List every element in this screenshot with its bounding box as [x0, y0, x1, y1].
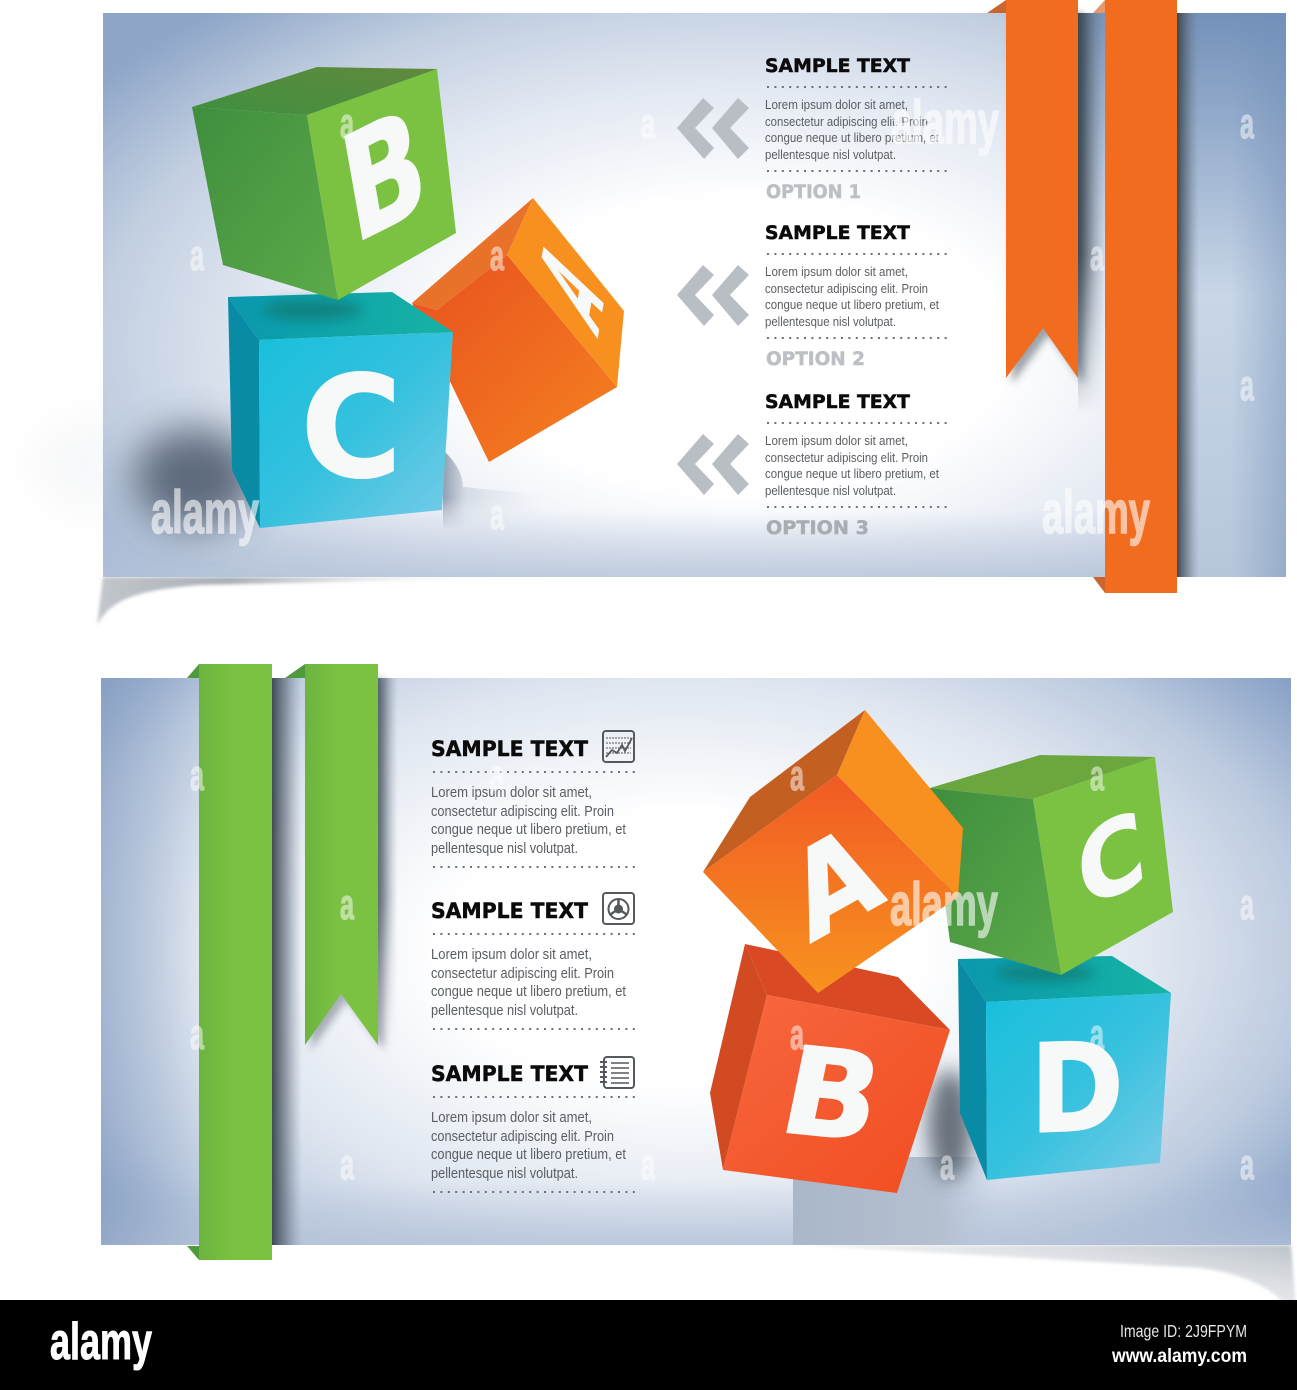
cube: orange A [703, 710, 963, 993]
heading 1: SAMPLE TEXT [765, 55, 910, 77]
cube: green C: C [1072, 789, 1151, 933]
body 2: congue neque ut libero pretium, et [765, 297, 939, 312]
watermarks: a [1240, 100, 1255, 148]
ribbon: green long band [187, 664, 272, 1260]
body 2: Lorem ipsum dolor sit amet, [765, 264, 908, 279]
body 1: pellentesque nisl volutpat. [765, 147, 896, 162]
icon: chart [603, 731, 634, 762]
option label 1: OPTION 1 [766, 181, 861, 203]
watermarks: alamy [151, 479, 259, 546]
body 2 [765, 264, 939, 329]
panel: bottom banner [101, 664, 1297, 1322]
watermarks: a [1090, 1011, 1105, 1059]
watermarks: a [1090, 752, 1105, 800]
watermarks: a [641, 1141, 656, 1189]
cube: orange A: A [773, 798, 897, 970]
right strip background [1078, 13, 1286, 577]
watermarks: alamy [1042, 479, 1150, 546]
body 1: congue neque ut libero pretium, et [765, 130, 939, 145]
watermarks: a [790, 1011, 805, 1059]
watermarks: a [1240, 362, 1255, 410]
body 3 [765, 433, 939, 498]
cube: green B [192, 67, 456, 300]
watermarks: a [1090, 232, 1105, 280]
body 3: Lorem ipsum dolor sit amet, [431, 1110, 592, 1126]
body 3: pellentesque nisl volutpat. [765, 483, 896, 498]
icon: wheel [603, 893, 634, 924]
body 1: consectetur adipiscing elit. Proin [765, 114, 928, 129]
arrow: double chevron 3 [677, 434, 749, 495]
banner background [103, 13, 1286, 577]
icon: notebook [600, 1057, 634, 1088]
site url: www.alamy.com [1111, 1346, 1247, 1367]
footer logo: alamy [50, 1313, 152, 1371]
text block: option 2 [677, 222, 947, 370]
watermarks: a [1240, 1141, 1255, 1189]
ribbon: orange short bookmark [987, 0, 1078, 378]
text block: item 1 [431, 731, 635, 867]
cube: red B [710, 944, 950, 1193]
body 3: consectetur adipiscing elit. Proin [431, 1129, 614, 1145]
cube: blue C [228, 292, 453, 528]
heading 2: SAMPLE TEXT [431, 899, 588, 924]
body 3: consectetur adipiscing elit. Proin [765, 450, 928, 465]
body 3: congue neque ut libero pretium, et [431, 1147, 626, 1163]
cube: blue D: D [1030, 1016, 1124, 1161]
shadows cast by cubes [793, 1070, 1003, 1247]
body 2: Lorem ipsum dolor sit amet, [431, 947, 592, 963]
image id: Image ID: 2J9FPYM [1120, 1321, 1247, 1341]
watermarks: alamy [891, 89, 999, 156]
watermarks: a [190, 232, 205, 280]
watermarks: a [340, 100, 355, 148]
watermarks: a [190, 752, 205, 800]
panel: top banner [30, 0, 1286, 625]
watermarks: a [340, 1141, 355, 1189]
body 2 [431, 947, 626, 1019]
body 2: consectetur adipiscing elit. Proin [765, 281, 928, 296]
body 2: pellentesque nisl volutpat. [431, 1003, 578, 1019]
body 1 [765, 97, 939, 162]
banner background [101, 678, 1291, 1245]
watermarks [151, 89, 1255, 1189]
watermarks: a [490, 752, 505, 800]
watermarks: a [340, 881, 355, 929]
cube: orange A [412, 198, 624, 462]
arrow: double chevron 2 [677, 265, 749, 326]
cube: orange A: A [525, 217, 622, 360]
arrow: double chevron 1 [677, 98, 749, 159]
body 1: consectetur adipiscing elit. Proin [431, 804, 614, 820]
footer bar [0, 1300, 1297, 1390]
text block: option 1 [677, 55, 947, 203]
body 1 [431, 785, 626, 857]
text block: option 3 [677, 391, 947, 539]
body 1: pellentesque nisl volutpat. [431, 841, 578, 857]
watermarks: a [1240, 881, 1255, 929]
curled paper shadow below top banner [97, 577, 540, 625]
cube: red B: B [770, 1022, 893, 1170]
watermarks: a [940, 1141, 955, 1189]
watermarks: a [641, 362, 656, 410]
body 1: congue neque ut libero pretium, et [431, 822, 626, 838]
option label 3: OPTION 3 [766, 517, 869, 539]
heading 3: SAMPLE TEXT [431, 1062, 588, 1087]
cube: blue D [958, 956, 1171, 1180]
body 3: congue neque ut libero pretium, et [765, 466, 939, 481]
body 2: consectetur adipiscing elit. Proin [431, 966, 614, 982]
body 3: Lorem ipsum dolor sit amet, [765, 433, 908, 448]
text block: item 2 [431, 893, 635, 1029]
cube group: A B C D [703, 710, 1173, 1193]
heading 3: SAMPLE TEXT [765, 391, 910, 413]
cube group: A B C [192, 67, 624, 528]
body 2: congue neque ut libero pretium, et [431, 984, 626, 1000]
body 3 [431, 1110, 626, 1182]
watermarks: alamy [890, 871, 998, 938]
body 2: pellentesque nisl volutpat. [765, 314, 896, 329]
cube: green C [930, 755, 1173, 975]
watermarks: a [641, 100, 656, 148]
ribbon shadows [1012, 13, 1199, 577]
shadows cast by cubes [133, 428, 545, 530]
curled paper shadow below bottom banner [800, 1245, 1297, 1322]
cube: blue C: C [301, 346, 402, 509]
ribbon shadows [272, 678, 398, 1245]
watermarks: a [490, 232, 505, 280]
cube: green B: B [331, 76, 437, 277]
watermarks: a [790, 752, 805, 800]
heading 2: SAMPLE TEXT [765, 222, 910, 244]
body 3: pellentesque nisl volutpat. [431, 1166, 578, 1182]
watermarks: a [490, 491, 505, 539]
soft cube shadow beyond left edge [30, 415, 190, 515]
body 1: Lorem ipsum dolor sit amet, [431, 785, 592, 801]
heading 1: SAMPLE TEXT [431, 737, 588, 762]
body 1: Lorem ipsum dolor sit amet, [765, 97, 908, 112]
ribbon: green short bookmark [285, 664, 378, 1045]
watermarks: a [190, 1011, 205, 1059]
option label 2: OPTION 2 [766, 348, 865, 370]
ribbon: orange long band [1093, 0, 1177, 593]
text block: item 3 [431, 1057, 635, 1192]
